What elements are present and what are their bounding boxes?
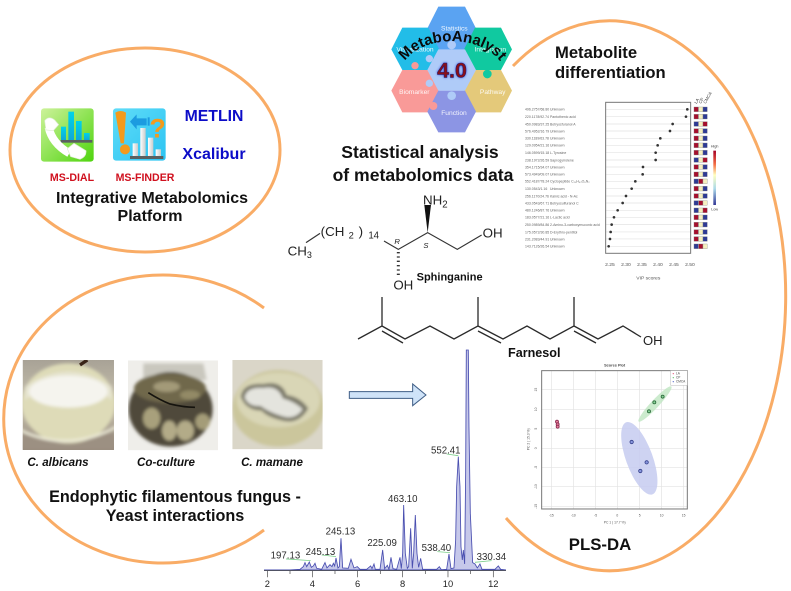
metabolite row labels: Unknown [550,245,565,249]
structure: sphinganine: 14 [368,231,380,242]
panel: fungus-yeast interactions [4,275,324,563]
hexagon: Function [427,91,476,132]
heading: metabolite differentiation: differentiation [555,63,666,82]
x axis ticks [605,262,695,281]
metabolite row labels: 231.2083/44.91 [525,237,549,241]
photo: C. albicans [20,360,117,450]
heading: PLS-DA: PLS-DA [569,535,631,554]
metabolite row labels: 238.1972/26.59 [525,158,549,162]
metabolite row labels: 496.2757/68.80 [525,108,549,112]
heatmap column labels: CMCA [702,91,713,104]
peak labels: 552.41 [431,446,461,457]
axis labels: -15 [534,504,538,509]
time axis [264,571,506,577]
icon: MS-DIAL [41,108,94,162]
metabolite row labels: L-Lactic acid [550,216,570,220]
peak labels: 225.09 [367,538,397,549]
label: Biomarker: Biomarker [399,89,430,96]
metabolite row labels: Unknown [550,129,565,133]
metabolite row labels: Kainic acid - N-Ac [550,194,578,198]
label: MS-FINDER: MS-FINDER [116,172,175,184]
label: Statistics: Statistics [441,25,468,32]
peak labels [271,446,507,563]
metabolite row labels: 143.7126/26.54 [525,245,549,249]
hexagon: centre puzzle piece [426,41,476,100]
structure: farnesol: OH [643,333,662,348]
metabolite row labels: 480.1246/87.76 [525,209,549,213]
heading: integrative metabolomics platform: Platform [118,208,182,225]
peak labels: 463.10 [388,494,418,505]
peak annotation leaders [286,454,492,562]
arrow [349,384,426,406]
peak labels: 330.34 [477,552,507,563]
peak labels: 245.13 [306,547,335,558]
peak labels: 197.13 [271,551,300,562]
photo: co-culture [128,360,218,450]
peak labels: 538.40 [422,543,451,554]
x axis ticks: 2.25 [605,262,615,268]
spectrum trace [264,350,506,570]
axis labels: 5 [639,514,641,518]
VIP points [607,108,689,248]
chart: chromatogram: 2 [265,579,270,589]
metabolite row labels: 130.0543/1.16 [525,187,547,191]
structure: sphinganine: NH [423,193,442,208]
structure: sphinganine: R [394,237,400,246]
label: MS-DIAL: MS-DIAL [50,172,95,184]
x axis ticks: VIP scores [636,275,661,281]
label: METLIN: METLIN [185,108,243,125]
heatmap column labels: LA [693,97,700,104]
metabolite row labels: Unknown [550,108,565,112]
metabolite row labels: Unknown [550,144,565,148]
icon: MS-FINDER [113,108,166,161]
x axis ticks: 2.35 [637,262,647,268]
metabolite row labels: L-Tyrosine [550,151,566,155]
metabolite row labels: Botryosulfuranol C [550,201,579,205]
structure: sphinganine: ) [359,224,363,239]
axis labels: -5 [594,514,597,518]
chart: chromatogram: 12 [488,579,499,589]
structure: sphinganine: OH [393,277,413,292]
heatmap column labels [693,91,713,104]
outline: platform ellipse [10,48,280,252]
chart: VIP scores [525,91,718,281]
metabolite row labels: 220.1178/92.74 [525,115,549,119]
outline: interactions arc [4,275,264,563]
axis labels: PC 1 ( 17.7 %) [604,521,626,525]
label: Visualization: Visualization [396,47,434,54]
chart: chromatogram: 6 [355,579,360,589]
label: Function: Function [441,110,467,117]
chart: chromatogram [264,350,507,589]
axis labels: -10 [534,484,538,489]
metabolite row labels: Unknown [550,165,565,169]
metabolite row labels: 552.4187/78.24 [525,180,549,184]
hexagon: Pathway [464,70,512,112]
structure: sphinganine: OH [483,226,503,241]
blue confidence ellipse [614,418,665,499]
plot frame [542,371,687,509]
structure: sphinganine: S [423,241,429,250]
chart: chromatogram: 8 [400,579,405,589]
x axis ticks: 2.45 [669,262,679,268]
heatmap colour scale: Low [711,208,718,212]
hexagon: Statistics [427,7,476,50]
row guides [606,109,690,246]
plot frame [606,102,691,253]
logo: MetaboAnalyst 4.0 [391,6,512,132]
legend [671,371,687,385]
legend: CP [676,376,680,380]
x axis ticks: 2.40 [653,262,663,268]
structure: farnesol [358,297,662,360]
heading: statistical analysis: Statistical analysis [341,142,499,162]
heading: metabolite differentiation: Metabolite [555,43,637,62]
metabolite row labels: 146.0599/15.18 [525,151,549,155]
caption: Co-culture: Co-culture [137,456,196,469]
axis labels: 0 [534,447,538,449]
heatmap colour scale [711,145,718,212]
axis labels: 10 [660,514,664,518]
axis labels: 15 [534,388,538,392]
metabolite row labels: Unknown [550,137,565,141]
plot title: Scores Plot [604,363,626,367]
metabolite row labels: 330.1189/63.78 [525,137,549,141]
metabolite row labels: 433.0543/67.71 [525,201,549,205]
metabolite row labels: 573.4949/09.07 [525,173,549,177]
metabolite row labels [525,108,600,249]
structure: sphinganine: (CH [321,224,344,239]
green confidence ellipse [636,384,674,424]
metabolite row labels: 183.0577/21.16 [525,216,549,220]
version number: 4.0 [437,58,467,82]
metabolite row labels: 256.1170/24.76 [525,194,549,198]
structure: sphinganine: 2 [442,199,448,210]
chart: chromatogram: 10 [443,579,453,589]
heading: fungus-yeast interactions: Endophytic filamentous fungus - [49,488,301,506]
label: Xcalibur: Xcalibur [182,146,246,163]
heading: statistical analysis: of metabolomics data [333,165,514,185]
metabolite row labels: 354.1715/34.07 [525,165,549,169]
axis labels: PC 2 ( 15.3 %) [526,428,530,450]
chart: chromatogram: 4 [310,579,315,589]
axis labels: 5 [534,428,538,430]
icon: MS-FINDER: ? [149,114,166,144]
x axis ticks: 2.30 [621,262,631,268]
panel: metabolite differentiation and PLS-DA [506,21,786,571]
axis labels: -5 [534,466,538,469]
outline: right arc [506,21,786,571]
axis labels: 15 [682,514,686,518]
metabolite row labels: Unknown [550,209,565,213]
hexagon: Biomarker [391,70,439,112]
peak labels: 245.13 [326,527,355,538]
heading: fungus-yeast interactions: Yeast interactions [106,507,244,525]
x axis ticks: 2.50 [685,262,695,268]
label: Sphinganine: Sphinganine [417,271,483,283]
legend: CMCA [676,380,686,384]
wordmark: MetaboAnalyst: MetaboAnalyst [398,31,506,61]
metabolite row labels: Botryosfuranol A [550,122,576,126]
caption: C. albicans: C. albicans [27,456,89,469]
heatmap column labels: CP [698,97,705,104]
metabolite row labels: D-Erythro-pentitol [550,230,578,234]
glow behind version number: 4.0 [437,58,467,82]
structure: sphinganine: 3 [307,250,312,260]
heatmap [694,107,707,249]
caption: C. mamane: C. mamane [241,456,303,469]
heading: integrative metabolomics platform: Integrative Metabolomics [56,190,248,207]
hexagon: Integration [464,28,512,70]
hexagon: Visualization [391,28,439,70]
structure: sphinganine [288,193,503,292]
metabolite row labels: Unknown [550,237,565,241]
legend: LA [676,372,681,376]
chart: PLS-DA scores plot [526,363,687,525]
metabolite row labels: Unknown [550,173,565,177]
axis labels: 0 [616,514,618,518]
label: Farnesol: Farnesol [508,346,560,360]
metabolite row labels: Pantothenic acid [550,115,576,119]
metabolite row labels: Cyclopeptide C₂₄H₄₂O₆N₂ [550,180,590,184]
photo: C. mamane [232,360,324,449]
structure: sphinganine: 2 [349,231,354,241]
metabolite row labels: 450.0983/37.25 [525,122,549,126]
axis labels: 10 [534,407,538,411]
structure: sphinganine: CH [288,243,307,258]
metabolite row labels: 250.0989/84.86 [525,223,549,227]
score points [555,395,664,473]
axis labels [526,388,686,525]
axis labels: -15 [549,514,554,518]
metabolite row labels: Unknown [550,187,565,191]
metabolite row labels: 2-Amino-3-carboxymuconic acid [550,223,600,227]
metabolite row labels: Saprogyrrolene [550,158,574,162]
label: Integration: Integration [475,47,506,54]
metabolite row labels: 576.4952/16.79 [525,129,549,133]
heatmap colour scale: High [711,145,718,149]
panel: integrative metabolomics platform [10,48,280,252]
metabolite row labels: 129.0954/21.16 [525,144,549,148]
label: Pathway: Pathway [480,89,506,96]
metabolite row labels: 175.0572/30.85 [525,230,549,234]
axis labels: -10 [571,514,576,518]
